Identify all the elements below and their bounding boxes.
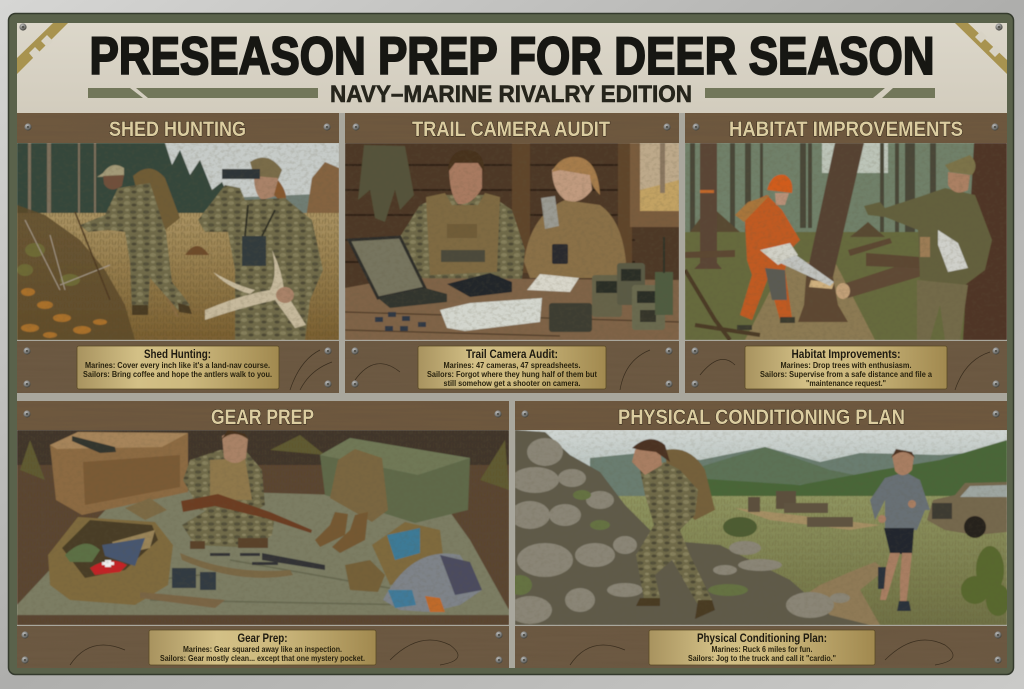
header: trail camera audit: TRAIL CAMERA AUDIT [412,118,610,141]
worker in orange [735,175,800,330]
subtitle bar right [705,88,935,98]
spreadsheets [440,298,542,331]
illustration: habitat improvements [685,143,1007,340]
header: shed hunting: SHED HUNTING [109,118,246,141]
table [345,278,679,340]
panel: trail camera audit [345,113,679,393]
plaque: trail camera audit [418,346,606,389]
runner [870,449,930,611]
jacket on wall [358,145,414,222]
supervisor man [864,155,992,340]
plaque: gear prep: Gear Prep: [238,631,288,645]
man at table [398,150,525,280]
open bag [48,517,173,605]
plaque: habitat improvements [745,346,947,389]
footer: gear prep [17,626,509,668]
header: gear prep: GEAR PREP [211,406,314,429]
felled logs [685,238,922,299]
wooden crate [50,432,188,515]
plaque: gear prep [149,630,376,665]
illustration: trail camera audit [345,143,679,340]
green hard case [320,438,470,523]
tactical backpack [330,449,388,522]
footer: habitat improvements [685,341,1007,393]
header: habitat improvements: HABITAT IMPROVEMENTS [729,118,963,141]
plaque: shed hunting: Marines: Cover every inch like it's a land-nav course. [85,360,270,370]
plaque: habitat improvements: Sailors: Supervise from a safe distance and file a [760,369,932,379]
rucking soldier [632,439,715,619]
header: physical conditioning plan: PHYSICAL CONDITIONING PLAN [618,406,905,429]
tablet [447,273,512,297]
main tree [806,143,864,278]
header: habitat improvements [685,113,1007,143]
right tree [963,143,1007,340]
plaque: physical conditioning plan: Physical Conditioning Plan: [697,631,827,645]
header: shed hunting [17,113,339,143]
plaque: trail camera audit: still somehow get a shooter on camera. [444,378,580,388]
chainsaw [760,243,798,265]
plaque: physical conditioning plan: Marines: Ruck 6 miles for fun. [712,644,812,654]
panel: gear prep [17,401,509,668]
plaque: physical conditioning plan [649,630,875,665]
plaque: habitat improvements: "maintenance request." [806,378,886,388]
plaque: shed hunting: Sailors: Bring coffee and hope the antlers walk to you. [83,369,272,379]
illustration: physical conditioning plan [508,430,1010,625]
header: gear prep [17,401,509,430]
illustration: shed hunting [17,143,339,340]
window [630,143,679,227]
header: trail camera audit [345,113,679,143]
duffel and clothes [345,522,482,612]
rock slope [508,430,870,625]
tarp [17,490,509,615]
corner chevrons right [955,23,1007,74]
subtitle bar left [88,88,318,98]
obstacle course [735,491,880,530]
plaque: gear prep: Sailors: Gear mostly clean... except that one mystery pocket. [160,653,365,663]
fallen branches [685,270,760,340]
illustration: gear prep [17,430,509,625]
plaque: physical conditioning plan: Sailors: Jog to the truck and call it "cardio." [688,653,836,663]
woman with binoculars [198,158,323,340]
footer: physical conditioning plan [515,626,1007,668]
photo print [527,274,579,292]
corner chevrons left [17,23,68,74]
panel: shed hunting [17,113,339,393]
panel: habitat improvements [685,113,1007,393]
man with backpack [80,165,192,315]
pickup truck [927,482,1007,538]
rugged laptop [349,237,447,308]
header: physical conditioning plan [515,401,1007,430]
banner screws [19,23,1003,31]
woman with coffee [524,157,626,278]
kneeling soldier [182,430,275,549]
plaque: trail camera audit: Marines: 47 cameras, 47 spreadsheets. [444,360,580,370]
plaque: habitat improvements: Habitat Improvements: [792,347,900,361]
title banner [17,23,1007,113]
plaque: trail camera audit: Trail Camera Audit: [466,347,558,361]
shrub [723,517,757,537]
brush pile [691,212,884,238]
plaque: habitat improvements: Marines: Drop trees with enthusiasm. [780,360,912,370]
rifle [181,494,312,533]
sd cards [375,312,426,331]
trail cameras [549,237,673,332]
left tree [694,143,722,269]
subtitle: NAVY–MARINE RIVALRY EDITION [330,81,692,108]
small gear on tarp [125,498,325,608]
panel grid background [17,110,1007,668]
boots [315,512,368,553]
plaque: shed hunting: Shed Hunting: [144,347,211,361]
panel: physical conditioning plan [508,401,1010,668]
footer: shed hunting [17,341,339,393]
plaque: gear prep: Marines: Gear squared away like an inspection. [183,644,342,654]
footer: trail camera audit [345,341,679,393]
plaque: shed hunting [77,346,279,389]
plaque: trail camera audit: Sailors: Forgot where they hung half of them but [427,369,597,379]
bush [961,546,1010,616]
